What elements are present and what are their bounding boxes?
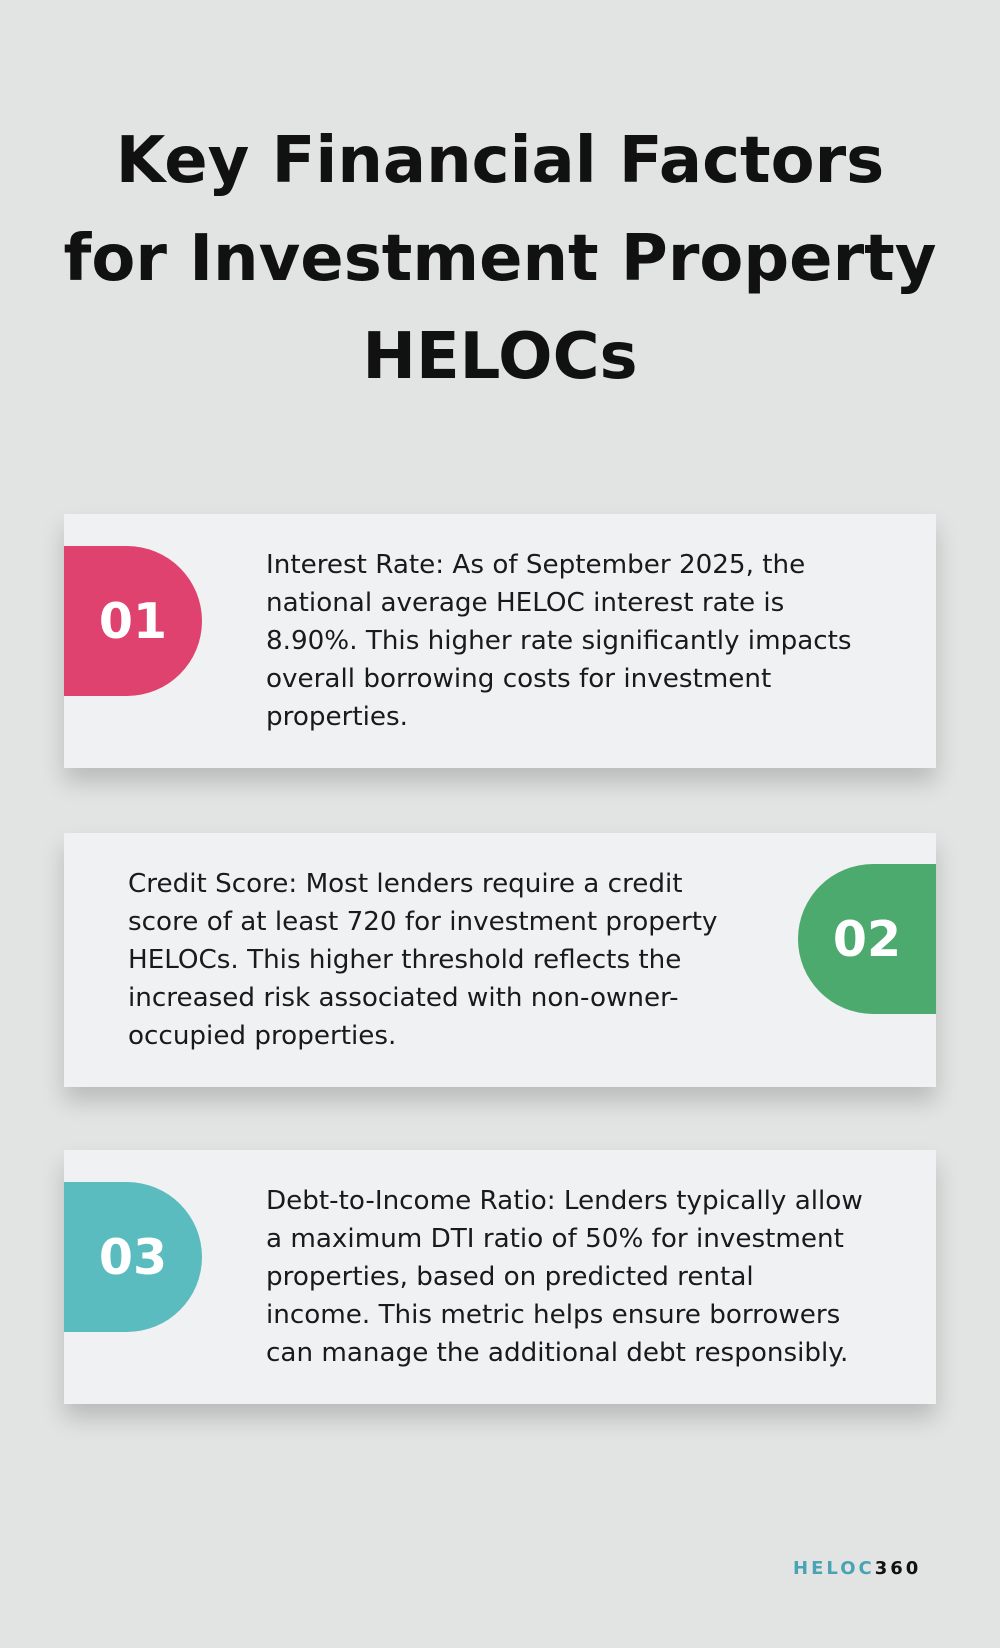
badge 02 — [798, 864, 936, 1014]
text: DTI — [266, 1186, 863, 1368]
text: DTI: properties, based on predicted rental — [266, 1262, 754, 1292]
text: interest rate: properties. — [266, 702, 408, 732]
title: Key Financial Factors — [116, 124, 884, 198]
title: for Investment Property — [64, 222, 936, 296]
text: credit score: HELOCs. This higher threshold reflects the — [128, 945, 681, 975]
panel: interest rate — [64, 514, 936, 768]
text: credit score: occupied properties. — [128, 1021, 396, 1051]
panel: credit score — [64, 833, 936, 1087]
title — [64, 124, 936, 394]
badge 03: 03 — [99, 1228, 167, 1286]
badge 03 — [64, 1182, 202, 1332]
panel: DTI — [64, 1150, 936, 1404]
text: DTI: can manage the additional debt responsibly. — [266, 1338, 848, 1368]
text: interest rate — [266, 550, 852, 732]
text: interest rate: Interest Rate: As of September 2025, the — [266, 550, 805, 580]
text: credit score: increased risk associated with non-owner- — [128, 983, 679, 1013]
text: credit score: score of at least 720 for investment property — [128, 907, 718, 937]
text: DTI: Debt-to-Income Ratio: Lenders typically allow — [266, 1186, 863, 1216]
text: interest rate: national average HELOC interest rate is — [266, 588, 784, 618]
text: DTI: income. This metric helps ensure borrowers — [266, 1300, 840, 1330]
text: DTI: a maximum DTI ratio of 50% for investment — [266, 1224, 844, 1254]
text: credit score: Credit Score: Most lenders require a credit — [128, 869, 683, 899]
logo: HELOC360 — [793, 1558, 921, 1579]
title: HELOCs — [362, 320, 638, 394]
text: credit score — [128, 869, 718, 1051]
text: interest rate: 8.90%. This higher rate significantly impacts — [266, 626, 852, 656]
text: interest rate: overall borrowing costs for investment — [266, 664, 771, 694]
badge 01: 01 — [99, 592, 167, 650]
badge 01 — [64, 546, 202, 696]
badge 02: 02 — [833, 910, 901, 968]
